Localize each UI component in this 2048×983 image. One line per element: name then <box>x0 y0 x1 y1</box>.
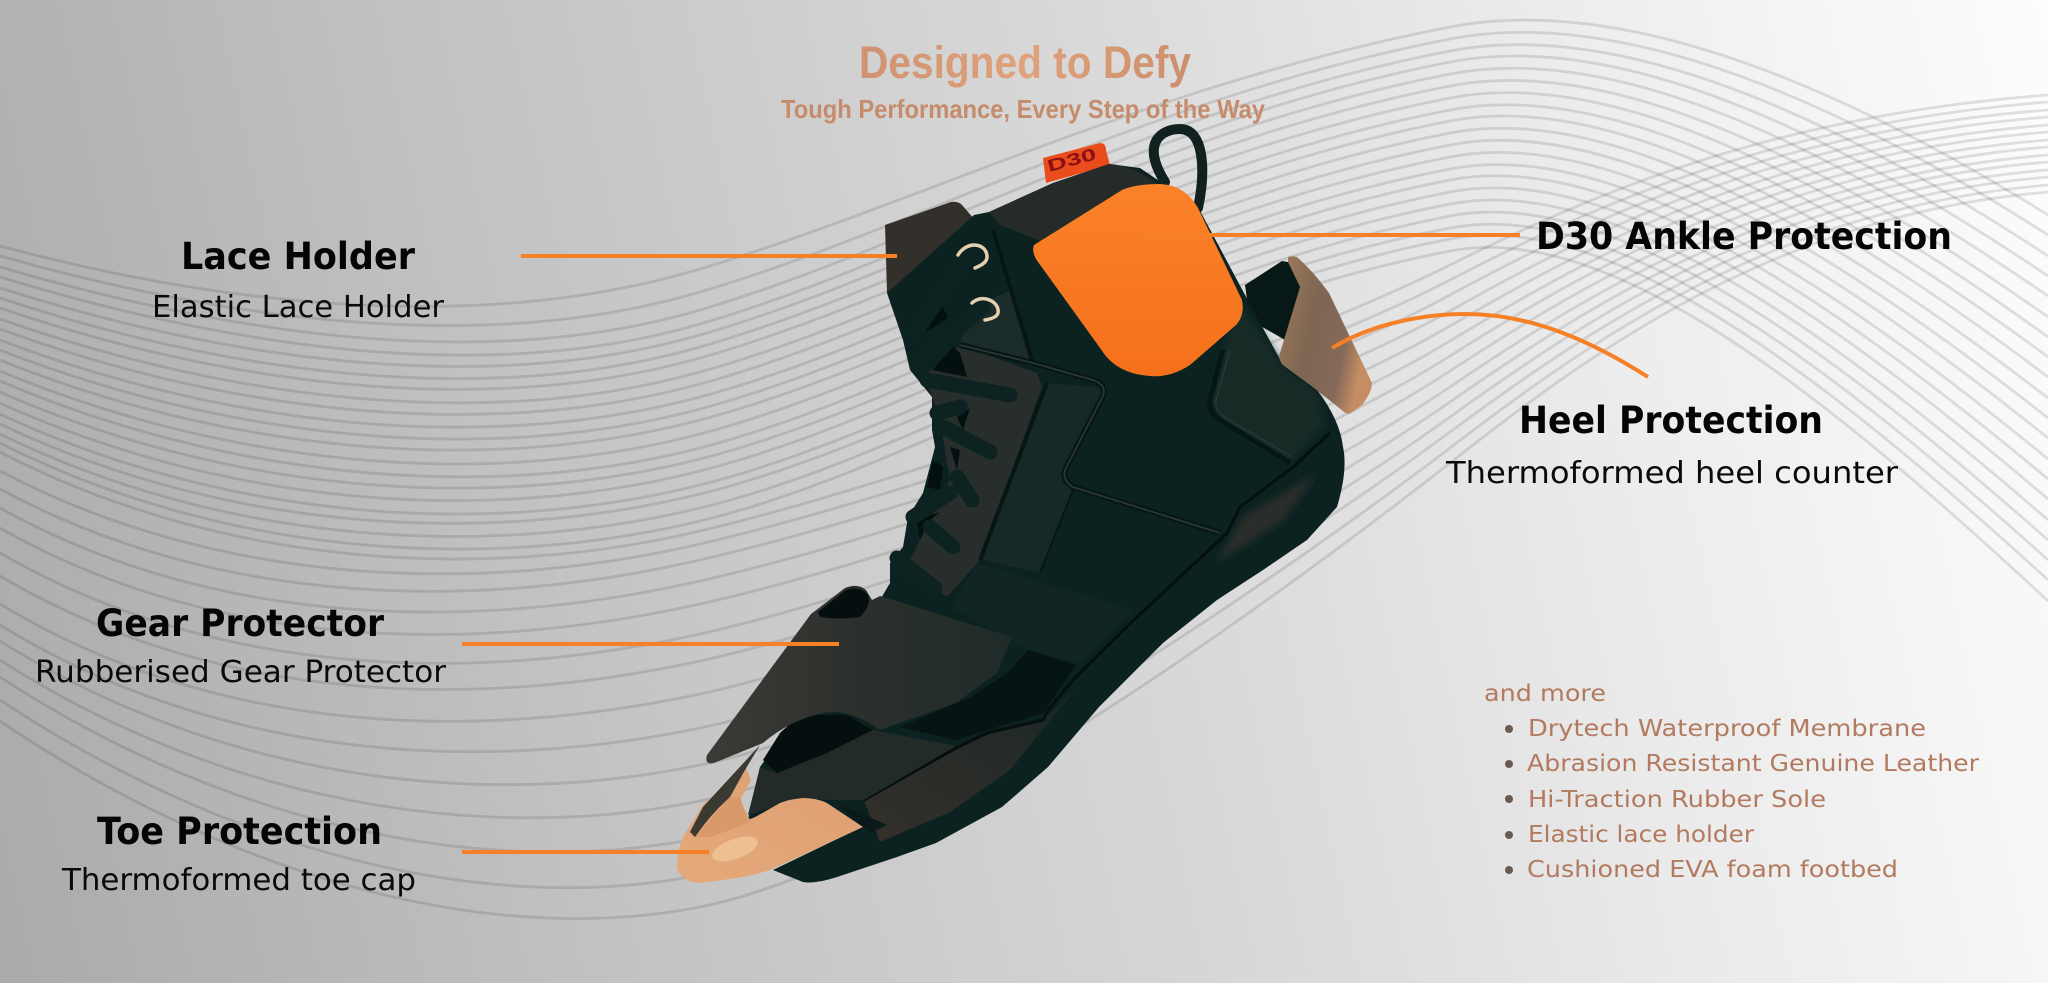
heading: Designed to Defy: Designed to Defy <box>859 37 1191 88</box>
cap inner shell <box>695 797 750 837</box>
heel interior <box>1245 261 1302 340</box>
stitch lines <box>864 230 1330 800</box>
toe box opening <box>763 715 873 773</box>
laces <box>897 253 1010 588</box>
D30 tag <box>1043 143 1110 183</box>
boot body <box>748 164 1345 882</box>
toe cap <box>677 745 887 883</box>
title <box>781 37 1265 124</box>
label: Heel Protection: Thermoformed heel counter <box>1445 456 1899 491</box>
label: Gear Protector <box>35 602 447 690</box>
label: Lace Holder: Elastic Lace Holder <box>152 290 445 325</box>
subheading: Tough Performance, Every Step of the Way <box>781 94 1265 124</box>
line: D30 ankle <box>1142 233 1520 237</box>
D30 ankle pad <box>1033 184 1243 376</box>
toe midsole <box>864 690 1075 842</box>
label: D30 Ankle Protection: D30 Ankle Protection <box>1536 215 1952 258</box>
label: Gear Protector: Gear Protector <box>96 602 385 645</box>
feature list: Elastic lace holder <box>1528 822 1755 848</box>
line: heel <box>1332 314 1648 377</box>
line: lace holder <box>521 254 897 258</box>
label: Lace Holder <box>152 235 445 325</box>
cap highlight <box>709 831 761 867</box>
feature list <box>1484 681 1980 883</box>
toe cap outer <box>677 765 863 883</box>
boot illustration <box>677 129 1372 883</box>
toe shadow <box>837 803 887 833</box>
lower panel <box>951 563 1135 663</box>
line: gear protector <box>462 642 839 646</box>
cap dark sliver <box>690 745 760 837</box>
label: Toe Protection: Toe Protection <box>97 810 382 853</box>
pull loop <box>1154 129 1202 208</box>
D30 tag: D30 <box>1045 145 1098 176</box>
label: Toe Protection: Thermoformed toe cap <box>61 863 416 898</box>
eyestay panel <box>905 345 1042 597</box>
label: Lace Holder: Lace Holder <box>181 235 416 278</box>
toe upper <box>748 730 956 815</box>
feature list: Cushioned EVA foam footbed <box>1527 857 1898 883</box>
callout lines <box>462 235 1648 852</box>
heel cap <box>1279 256 1372 414</box>
lace shadows <box>917 305 970 540</box>
label: Toe Protection <box>61 810 416 898</box>
gear protector flap <box>706 586 1012 763</box>
label: Gear Protector: Rubberised Gear Protector <box>35 655 447 690</box>
inner dark cavity <box>900 650 1076 740</box>
line: toe protection <box>462 850 709 854</box>
lace holder tongue <box>885 202 985 345</box>
feature list: Drytech Waterproof Membrane <box>1528 716 1926 742</box>
list bullets <box>1505 725 1513 874</box>
eyestay upper <box>960 290 1030 360</box>
feature list: Abrasion Resistant Genuine Leather <box>1527 751 1980 777</box>
heel panel <box>1210 300 1325 463</box>
feature list: and more <box>1484 681 1606 707</box>
side panel <box>983 383 1105 573</box>
heel midsole highlight <box>1217 473 1317 563</box>
eyelets <box>958 245 998 320</box>
label: Heel Protection <box>1445 399 1899 491</box>
label: Heel Protection: Heel Protection <box>1519 399 1823 442</box>
collar mesh <box>989 164 1165 245</box>
feature list: Hi-Traction Rubber Sole <box>1528 787 1826 813</box>
